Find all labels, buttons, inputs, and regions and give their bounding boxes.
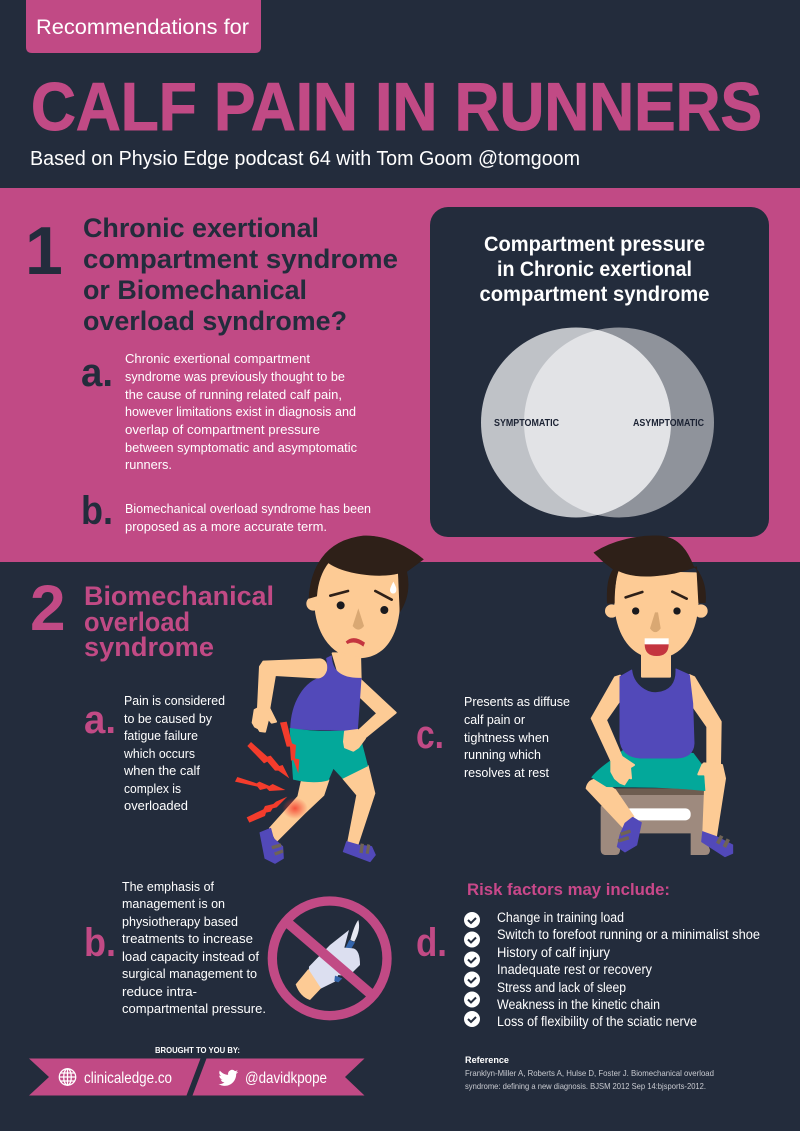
section 1 point a: a. xyxy=(81,351,113,395)
section 1 point b: b. xyxy=(81,489,113,533)
icon: globe xyxy=(59,1069,76,1085)
venn diagram: SYMPTOMATIC xyxy=(494,418,559,429)
risk factors list xyxy=(497,910,760,1029)
section 1 point b: Biomechanical overload syndrome has been xyxy=(125,502,371,516)
section 2 point c: calf pain or xyxy=(464,713,525,727)
section 1 point b: proposed as a more accurate term. xyxy=(125,520,327,534)
risk factors list: History of calf injury xyxy=(497,945,610,960)
section 2 point c: running which xyxy=(464,748,541,762)
section 2 point b: reduce intra- xyxy=(122,985,197,999)
section 2 point a xyxy=(84,694,225,813)
section 2 point a: fatigue failure xyxy=(124,729,198,743)
section 2 point a: a. xyxy=(84,698,116,742)
panel heading: compartment syndrome xyxy=(480,283,710,306)
panel heading xyxy=(480,233,710,306)
section 1 point a: overlap of compartment pressure xyxy=(125,423,320,437)
venn diagram: ASYMPTOMATIC xyxy=(633,418,704,429)
reference xyxy=(465,1055,714,1091)
icon: twitter bird xyxy=(218,1070,238,1086)
panel heading: in Chronic exertional xyxy=(497,258,692,281)
section 1 heading: or Biomechanical xyxy=(83,275,307,305)
illustration: runner in pain xyxy=(235,536,423,863)
section 2 point b: b. xyxy=(84,921,116,965)
section 2 point b: load capacity instead of xyxy=(122,950,260,964)
panel heading: Compartment pressure xyxy=(484,233,705,256)
icon: no surgery xyxy=(272,901,387,1016)
section 2 point a: when the calf xyxy=(123,764,201,778)
section 1 point a: however limitations exist in diagnosis and xyxy=(125,405,356,419)
section 2 heading xyxy=(84,581,274,662)
section 2 point a: which occurs xyxy=(123,747,195,761)
reference: Franklyn-Miller A, Roberts A, Hulse D, Foster J. Biomechanical overload xyxy=(465,1068,714,1078)
section 2 point c: resolves at rest xyxy=(464,766,550,780)
section 2 point b: treatments to increase xyxy=(122,932,253,946)
risk factors list: Change in training load xyxy=(497,910,624,925)
section 1 point b xyxy=(81,489,371,534)
ribbon: website: clinicaledge.co xyxy=(84,1070,172,1087)
section 2 point a: complex is xyxy=(124,782,181,796)
section 2 point b: physiotherapy based xyxy=(122,915,238,929)
header tab xyxy=(26,0,261,53)
reference: syndrome: defining a new diagnosis. BJSM 2012 Sep 14:bjsports-2012. xyxy=(465,1081,706,1091)
illustration: seated runner xyxy=(587,536,733,857)
ribbon: website xyxy=(29,1058,200,1096)
section 1 heading: Chronic exertional xyxy=(83,213,319,243)
section 2 heading: Biomechanical xyxy=(84,581,274,611)
ribbon: twitter: @davidkpope xyxy=(245,1070,327,1087)
section 1 point a: the cause of running related calf pain, xyxy=(125,388,342,402)
section 2 heading: syndrome xyxy=(84,632,214,662)
ribbon: twitter xyxy=(192,1058,364,1096)
risk factors list: Stress and lack of sleep xyxy=(497,980,626,995)
section 2 point c: Presents as diffuse xyxy=(464,695,570,709)
section 1 point a: between symptomatic and asymptomatic xyxy=(125,441,357,455)
check icons xyxy=(464,912,480,1027)
section 2 point b xyxy=(84,880,266,1016)
risk factors list: Weakness in the kinetic chain xyxy=(497,997,660,1012)
section 2 heading: overload xyxy=(84,607,190,637)
section 2 point c: c. xyxy=(416,713,444,757)
section 1 heading: compartment syndrome xyxy=(83,244,398,274)
section 1 heading: overload syndrome? xyxy=(83,306,347,336)
section 2 point b: The emphasis of xyxy=(122,880,215,894)
risk factors list: Loss of flexibility of the sciatic nerve xyxy=(497,1014,697,1029)
section 2 point d: d. xyxy=(416,921,447,965)
venn diagram xyxy=(481,328,714,518)
section 2 point c xyxy=(416,695,570,780)
panel: compartment pressure xyxy=(430,207,769,537)
reference: Reference xyxy=(465,1055,509,1065)
section 2 point a: Pain is considered xyxy=(124,694,225,708)
section 1 point a: runners. xyxy=(125,458,172,472)
section 2 point a: to be caused by xyxy=(124,712,213,726)
subtitle: Based on Physio Edge podcast 64 with Tom Goom @tomgoom xyxy=(30,148,580,170)
header tab: Recommendations for xyxy=(36,16,249,39)
section 1 point a: Chronic exertional compartment xyxy=(125,352,311,366)
brought to you by label: BROUGHT TO YOU BY: xyxy=(155,1046,240,1055)
risk factors list: Switch to forefoot running or a minimalist shoe xyxy=(497,927,760,942)
section 1 number: 1 xyxy=(25,213,63,289)
section 1 heading xyxy=(83,213,398,336)
section 2 point c: tightness when xyxy=(464,731,549,745)
risk factors list: Inadequate rest or recovery xyxy=(497,962,652,977)
section 1 point a: syndrome was previously thought to be xyxy=(125,370,345,384)
section 2 number: 2 xyxy=(30,572,66,644)
panel: section 1 band xyxy=(0,188,800,562)
section 2 point b: compartmental pressure. xyxy=(122,1002,266,1016)
section 1 point a xyxy=(81,351,357,472)
section 2 point b: surgical management to xyxy=(122,967,257,981)
section 2 point a: overloaded xyxy=(124,799,188,813)
section 2 point b: management is on xyxy=(122,897,225,911)
risk factors heading: Risk factors may include: xyxy=(467,880,670,899)
